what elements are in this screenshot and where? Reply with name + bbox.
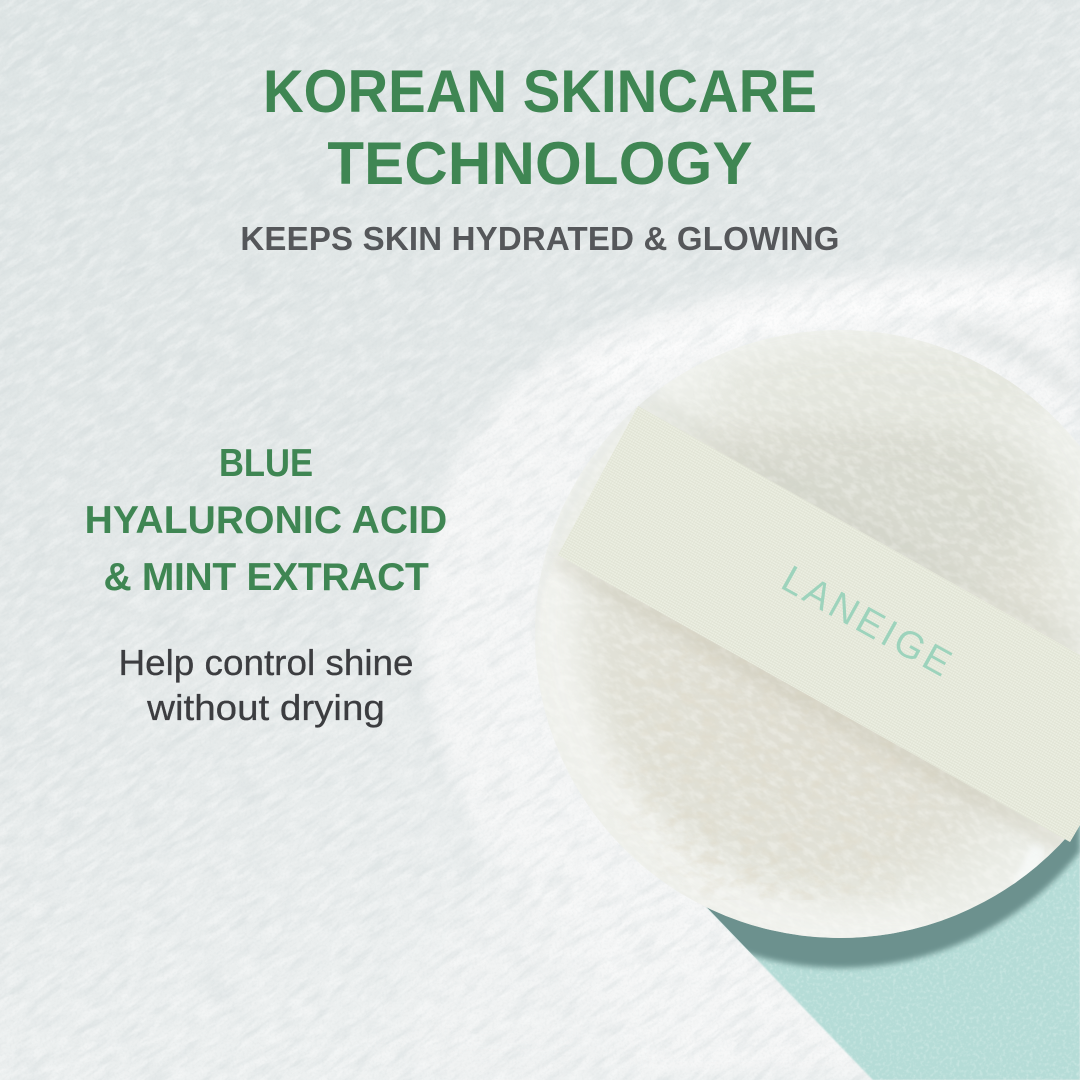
ingredient heading: HYALURONIC ACID <box>85 499 447 542</box>
ingredient heading: & MINT EXTRACT <box>103 556 429 599</box>
ribbon strap <box>558 406 1080 842</box>
subtitle: KEEPS SKIN HYDRATED & GLOWING <box>240 220 840 257</box>
ingredient description <box>118 642 414 728</box>
strap logo: LANEIGE <box>775 558 961 687</box>
ingredient heading: BLUE <box>219 442 313 485</box>
title: TECHNOLOGY <box>327 130 753 197</box>
ingredient heading <box>85 442 447 599</box>
ingredient description: without drying <box>147 687 385 728</box>
title <box>263 58 817 197</box>
powder puff <box>530 330 1080 940</box>
puff shadow <box>706 826 1080 972</box>
ingredient description: Help control shine <box>118 642 414 683</box>
teal surface <box>690 825 1080 1080</box>
title: KOREAN SKINCARE <box>263 58 817 125</box>
